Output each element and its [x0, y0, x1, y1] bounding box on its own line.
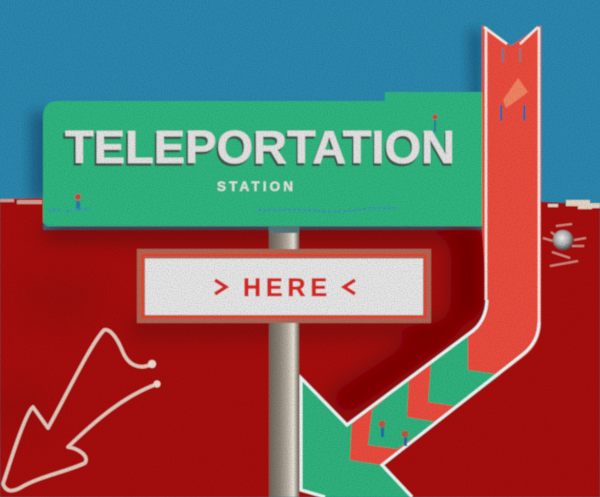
title: TELEPORTATION: TELEPORTATION: [65, 121, 455, 173]
background: blue wall: [0, 0, 600, 200]
label: HERE: HERE: [243, 274, 327, 302]
pole: [269, 226, 299, 497]
icon: small pin left: [75, 194, 81, 210]
panel: green sign board: [43, 92, 482, 226]
icon: chalk arrow: [3, 330, 160, 491]
peeling paint: right wall edge: [548, 200, 600, 209]
decoration: blue wire left: [48, 209, 90, 211]
shadow: mottled wall patches: [0, 278, 100, 430]
arrow: big neon arrow: [290, 20, 550, 497]
icon: small pin right: [432, 114, 438, 132]
icon: wall bolt: [543, 224, 586, 266]
chevron: right pointing: [215, 280, 226, 294]
arrow: neon outline upper: [484, 27, 539, 322]
peeling paint: left wall edge: [0, 199, 42, 204]
subtitle: STATION: STATION: [217, 179, 293, 194]
background: red wall: [0, 198, 600, 497]
title: TELEPORTATION shadow: TELEPORTATION: [63, 124, 454, 176]
chevron: left pointing: [344, 280, 355, 294]
shadow: sign and arrow shadow on red wall: [43, 224, 484, 420]
decoration: blue wire right: [258, 208, 398, 212]
texture: dotted highlight on shaft: [503, 78, 528, 108]
arrow: green chevron bands: [290, 332, 504, 497]
arrow: neon outline lower: [301, 300, 539, 497]
shadow: sign shadow on blue wall: [30, 30, 482, 200]
icon: arrow pins: [378, 48, 526, 446]
panel: HERE sign: [137, 249, 431, 323]
